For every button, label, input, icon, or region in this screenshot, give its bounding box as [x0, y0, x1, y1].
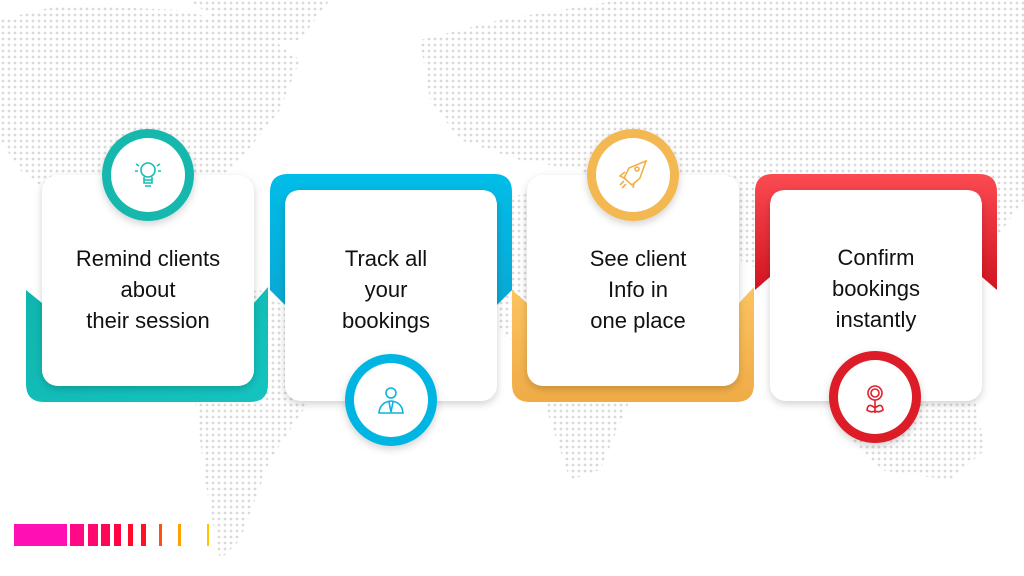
text: step 3: See client	[590, 246, 686, 271]
frame: blue	[270, 174, 512, 305]
text: step 1: Remind clients	[76, 246, 220, 271]
text: step 1	[76, 246, 220, 333]
text: step 4: bookings	[832, 276, 920, 301]
text: step 1: their session	[86, 308, 210, 333]
text: step 2: Track all	[345, 246, 427, 271]
frame: orange	[512, 287, 754, 402]
text: step 3	[590, 246, 686, 333]
text: step 4: instantly	[836, 307, 916, 332]
text: step 2	[342, 246, 430, 333]
text: step 3: Info in	[608, 277, 668, 302]
text: step 3: one place	[590, 308, 686, 333]
frame: red	[755, 174, 997, 290]
text: step 2: bookings	[342, 308, 430, 333]
text: step 2: your	[365, 277, 407, 302]
text: step 1: about	[120, 277, 176, 302]
frame: teal	[26, 287, 268, 402]
text: step 4	[832, 245, 920, 332]
text: step 4: Confirm	[837, 245, 914, 270]
